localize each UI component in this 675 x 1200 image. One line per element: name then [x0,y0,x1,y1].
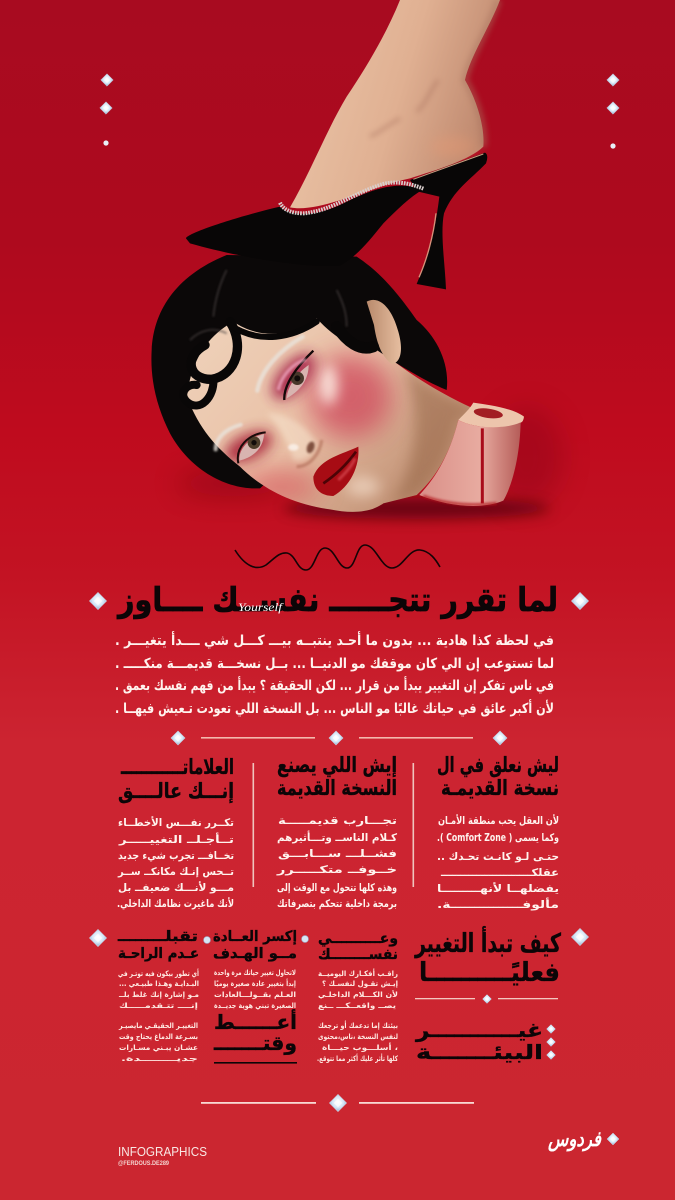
tip text: مـو إشارة إنك غلط بلــ [118,990,199,999]
footer divider [201,1094,474,1112]
column text [117,816,234,910]
tip heading [318,931,398,963]
tip text [118,968,199,1063]
column text: تجـــارب قديمـــــة [278,815,397,827]
shoe heel [410,153,487,289]
column text: وهذه كلها تتحول مع الوقت إلى [277,882,397,894]
column text [437,814,559,911]
ankle crease [370,80,438,137]
column text: مألوفـــــــــــــــة. [437,897,559,911]
footer credit: @FERDOUS.DE289 [118,1161,170,1167]
tip text: الصغيرة تبني هوية جديــدة [214,1001,296,1010]
heel glow [430,137,477,157]
neck and face [187,318,478,512]
tip text: العـلم بقــولـــالعادات [214,990,296,999]
eye shadow upper [264,346,323,407]
title gem right [572,592,588,610]
tip: self awareness [317,931,398,1063]
tip text: بسـرعة الدماغ يحتاج وقت [119,1032,198,1041]
column text: فشــلـــ ســـابـــق [278,848,397,860]
column text: حتـى لـو كانـت تحـدك .. [437,851,559,863]
tip heading: تقبلــــــــ [117,929,198,945]
nose shadow [297,440,322,467]
tip heading: give it time: أعــــــط [214,1008,297,1034]
vertical divider left [252,763,254,887]
illustration: foot in black heel [186,0,500,289]
tip heading: وعــــــــــي [318,931,398,947]
insole edge [413,154,483,179]
column heading [118,755,234,803]
tip: change the environment [415,1018,543,1064]
column heading: إيش اللي يصنع [277,753,397,777]
section heading: how to start [414,926,562,988]
logo signature: فردوس [547,1127,602,1152]
tip text: ، أسلـــوب حيـــاة [322,1042,398,1052]
tip heading: إكسر العــادة [213,929,297,945]
nose tip highlight [288,444,299,451]
column text: خــوفــ متكـــــرر [276,864,397,876]
lower eye [238,432,266,463]
column heading [277,753,397,800]
heel inner edge [419,213,436,277]
small gem between tips [204,937,210,943]
cheek blush [308,355,392,438]
tip heading: give it time: وقتـــــــ [213,1031,297,1055]
section divider [415,994,558,1004]
column text: كـلام الناســ وتـــأثيرهم [277,830,398,844]
column heading: إنـــك عالــــق [118,779,234,803]
chin highlight [347,477,380,497]
title gem left [90,592,106,610]
column heading [437,753,559,800]
intro paragraph: لأن أكبر عائق في حياتك غالبًا مو الناس ... بل النسخة اللي تعودت تـعيش فيهــا . [115,699,554,717]
column: what builds the old version [276,753,398,910]
column: why we cling [437,753,559,911]
gem beside section heading [572,928,588,946]
hair shine [190,270,347,340]
tip text [317,968,398,1063]
tip text: البـدايـة وهـذا طبيـعي ... [119,979,199,988]
foot [290,0,500,208]
vertical divider right [412,763,414,887]
face shading [219,346,480,507]
nose highlight [267,413,317,461]
intro paragraph: في ناس تفكر إن التغيير يبدأ من قرار ... لكن الحقيقة ؟ يبدأ من فهم نفسك بعمق . [115,676,554,694]
tip text: كلها تأثر عليك أكثر مما تتوقع. [317,1053,398,1063]
column: signs you are stuck [117,755,234,910]
tip text: إنــــ تتـقدمـــــك [119,1001,198,1010]
lips [313,447,359,496]
small gem between tips [302,936,308,942]
column text: وكما يسمى ( Comfort Zone ). [437,832,559,844]
tip text: لنفس النسخة ،ناس،محتوى [318,1032,398,1041]
divider with gems [171,731,507,745]
tip text: راقـب أفكـارك اليوميــة [318,968,398,978]
tip bullets [546,1024,556,1060]
footer credit: INFOGRAPHICS [118,1145,207,1159]
tip heading: مــو الهـدف [213,946,297,962]
upper eye [278,351,313,400]
tip: change the environment: البيئـــــــة [416,1040,543,1064]
decorative gems: top right [607,74,619,149]
decorative gems: top left [100,74,113,146]
section heading: how to start: كيف تبدأ التغيير [414,926,562,959]
forehead curl and hairline waves [183,322,373,406]
title accent word: Yourself [238,600,284,614]
column text: تخــافـــ تجرب شيء جديد [118,850,234,862]
cheek highlight [319,365,338,405]
column heading: العلامات‍ــــــــــــ [120,755,234,779]
column heading: نسخة القديمـة [441,776,559,800]
logo gem [607,1133,619,1145]
rhinestone trim [280,183,423,213]
neck shadow [394,370,470,500]
tip text: التغييـر الحقيقـي مايصيـر [118,1021,198,1030]
column text: عقلكـــــــــــــــــــــــ [440,867,559,879]
tip: break the habit [213,929,297,1064]
title: لما تقرر تتجــــــ نفســك ــــاوز [116,580,558,620]
tip text: لاتحاول تغيير حياتك مرة واحدة [214,968,296,977]
tip heading: عـدم الراحـة [118,946,199,962]
column text: لأن العقل يحب منطقة الأمـان [438,814,559,827]
tip text: عشـان يبـني مسـارات [119,1043,198,1052]
tip: change the environment: غيـــــــــــر [415,1018,543,1042]
column text: تكــرر نفـــس الأخطــاء [118,816,234,829]
intro paragraph: لما تستوعب إن الي كان موقفك مو الدنيــا ... بــل نسخـــة قديمـــة منكـــــ . [115,656,554,672]
hair [151,255,447,488]
tip text: بيئتك إما تدعمك أو ترجعك [318,1020,398,1030]
column heading: ليش نعلق في ال [437,753,559,777]
column text: يفضلهــا لأنهـــــــــا [437,882,559,895]
tip text: أي تطور بيكون فيه توتـر في [118,968,199,978]
tip text [214,968,296,1010]
lower brow [216,425,241,449]
tip text: لأن الكـــلام الداخلـي [318,990,398,999]
tip text: جديــــــــدة. [121,1054,198,1063]
tip text: إيـش تقـول لنفسـك ؟ [322,979,398,988]
heel shadow edge [465,0,498,147]
footer credit [118,1145,207,1167]
column text: تــحس إنـك مكانكــ ســر [117,866,234,878]
tip: accept discomfort [117,929,199,1063]
tip text: يصــ واقعــكـــ ــنع [318,1001,396,1010]
tip heading: نفســــــــك [318,947,398,963]
column text: تــأجـلــ التغييـــــر [118,832,234,846]
gem left of section [90,930,106,946]
illustration: severed head [151,255,563,519]
ear [367,300,401,364]
intro paragraph [115,631,554,717]
tip heading [117,929,199,962]
column text: برمجة داخلية تتحكم بتصرفاتك [277,898,397,910]
nostril [305,440,316,454]
neck stump [419,403,524,506]
eye shadow lower [219,424,277,469]
column text [276,815,398,910]
section heading: how to start: فعليًــــــــــا [419,958,560,988]
intro paragraph: في لحظة كذا هادية ... بدون ما أحـد ينتبــه بيـــ كـــل شي ــــدأ يتغيـــر . [115,631,554,649]
squiggle line [235,545,440,570]
lower cheek blush [240,470,320,503]
column text: لأنك ماغيرت نظامك الداخلي. [117,897,234,910]
column heading: النسخة القديمة [277,776,397,800]
shoe body [186,186,423,266]
tip text: إبدأ بتغيير عادة صغيرة يوميًا [214,978,296,988]
upper brow [257,337,303,391]
tip heading [213,929,297,962]
column text: مـــو لأنـــك ضعيفــ بل [118,881,234,894]
tip heading: give it time [213,1008,297,1064]
